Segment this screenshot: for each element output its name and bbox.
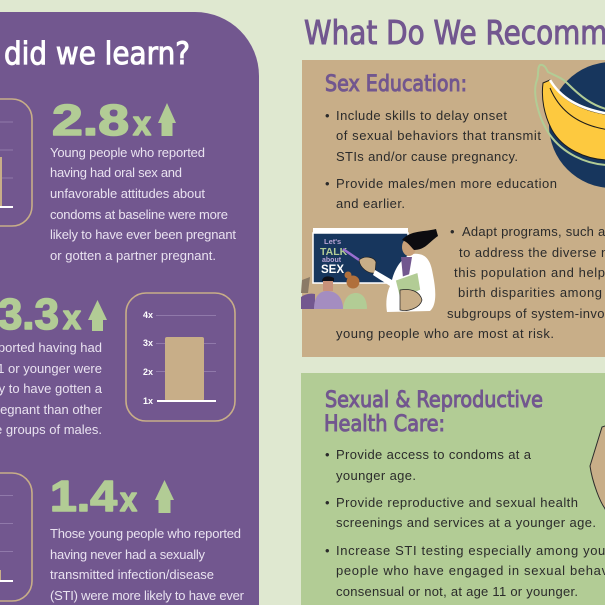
bullet list: health care: [325, 447, 605, 599]
bullet list: health care: •: [325, 447, 330, 462]
illustration: teacher at chalkboard with students: [301, 228, 438, 312]
bullet list: health care: Provide reproductive and sexual health: [336, 495, 578, 510]
bar chart 3: [0, 473, 32, 601]
text block: stat 1 description: likely to have ever been pregnant: [50, 227, 236, 242]
text block: stat 1 description: having had oral sex and: [50, 165, 182, 180]
text block: stat 3 description: (STI) were more likely to have ever: [50, 588, 245, 603]
bullet list: sex education: STIs and/or cause pregnancy.: [336, 149, 518, 164]
text block: stat 1 description: or gotten a partner pregnant.: [50, 248, 216, 263]
bar chart 2: 2x: [143, 367, 153, 377]
text block: stat 1 description: unfavorable attitudes about: [50, 186, 205, 201]
illustration: teacher at chalkboard with students: about: [322, 257, 342, 264]
text block: stat 3 description: [50, 526, 245, 603]
text block: adapt programs: birth disparities among: [458, 285, 602, 300]
stat: 2.8x: 2.8: [52, 96, 129, 145]
text block: adapt programs: this population and help: [454, 265, 605, 280]
heading: sexual and reproductive health care: Health Care:: [324, 412, 445, 437]
text block: stat 3 description: having never had a sexually: [50, 547, 206, 562]
bar chart 2: 4x: [143, 310, 153, 320]
icon: banana with condom: [535, 62, 605, 188]
text block: stat 3 description: transmitted infection/disease: [50, 567, 214, 582]
bar chart 2: 1x: [143, 396, 153, 406]
bullet list: health care: Provide access to condoms at a: [336, 447, 532, 462]
text block: adapt programs: [336, 224, 605, 341]
bar chart 2: 3x: [143, 338, 153, 348]
bullet list: sex education: Include skills to delay onset: [336, 108, 507, 123]
text block: stat 3 description: Those young people who reported: [50, 526, 241, 541]
bullet list: health care: screenings and services at a younger age.: [336, 515, 596, 530]
stat: 3.3x: [0, 290, 107, 339]
bullet list: health care: younger age.: [336, 468, 416, 483]
bullet list: sex education: of sexual behaviors that transmit: [336, 128, 541, 143]
bullet list: sex education: Provide males/men more education: [336, 176, 557, 191]
heading: what did we learn: did we learn?: [4, 36, 190, 72]
bullet list: sex education: and earlier.: [336, 196, 405, 211]
illustration: teacher at chalkboard with students: TALK: [320, 246, 348, 258]
heading: sexual and reproductive health care: [324, 388, 543, 437]
text block: stat 1 description: [50, 145, 236, 263]
stat: 1.4x: 1.4: [50, 472, 118, 521]
icon: hand: [590, 425, 605, 516]
panel: sex education: [301, 60, 605, 357]
stat: 1.4x: x: [120, 481, 137, 519]
panel: what did we learn: [0, 12, 259, 605]
panel: sexual and reproductive health care: [301, 373, 605, 605]
stat: 3.3x: x: [63, 299, 81, 337]
illustration: teacher at chalkboard with students: Let's: [324, 237, 341, 246]
text block: adapt programs: young people who are most at risk.: [336, 326, 554, 341]
stat: 2.8x: [52, 96, 176, 145]
heading: sexual and reproductive health care: Sexual & Reproductive: [325, 388, 543, 413]
text block: adapt programs: •: [450, 224, 455, 239]
bullet list: sex education: •: [325, 176, 330, 191]
bullet list: health care: consensual or not, at age 11 or younger.: [336, 584, 578, 599]
bullet list: health care: •: [325, 495, 330, 510]
stat: 1.4x: [50, 472, 174, 521]
bullet list: sex education: [325, 108, 557, 211]
heading: sex education: Sex Education:: [325, 72, 467, 97]
bullet list: sex education: •: [325, 108, 330, 123]
text block: stat 1 description: condoms at baseline were more: [50, 207, 228, 222]
bullet list: health care: •: [325, 543, 330, 558]
text block: stat 1 description: Young people who reported: [50, 145, 205, 160]
bar chart 1: [0, 99, 32, 226]
text block: stat 2 description: [0, 340, 103, 437]
bar chart 2: [126, 293, 235, 421]
illustration: teacher at chalkboard with students: SEX: [321, 264, 344, 276]
stat: 2.8x: x: [133, 105, 151, 143]
